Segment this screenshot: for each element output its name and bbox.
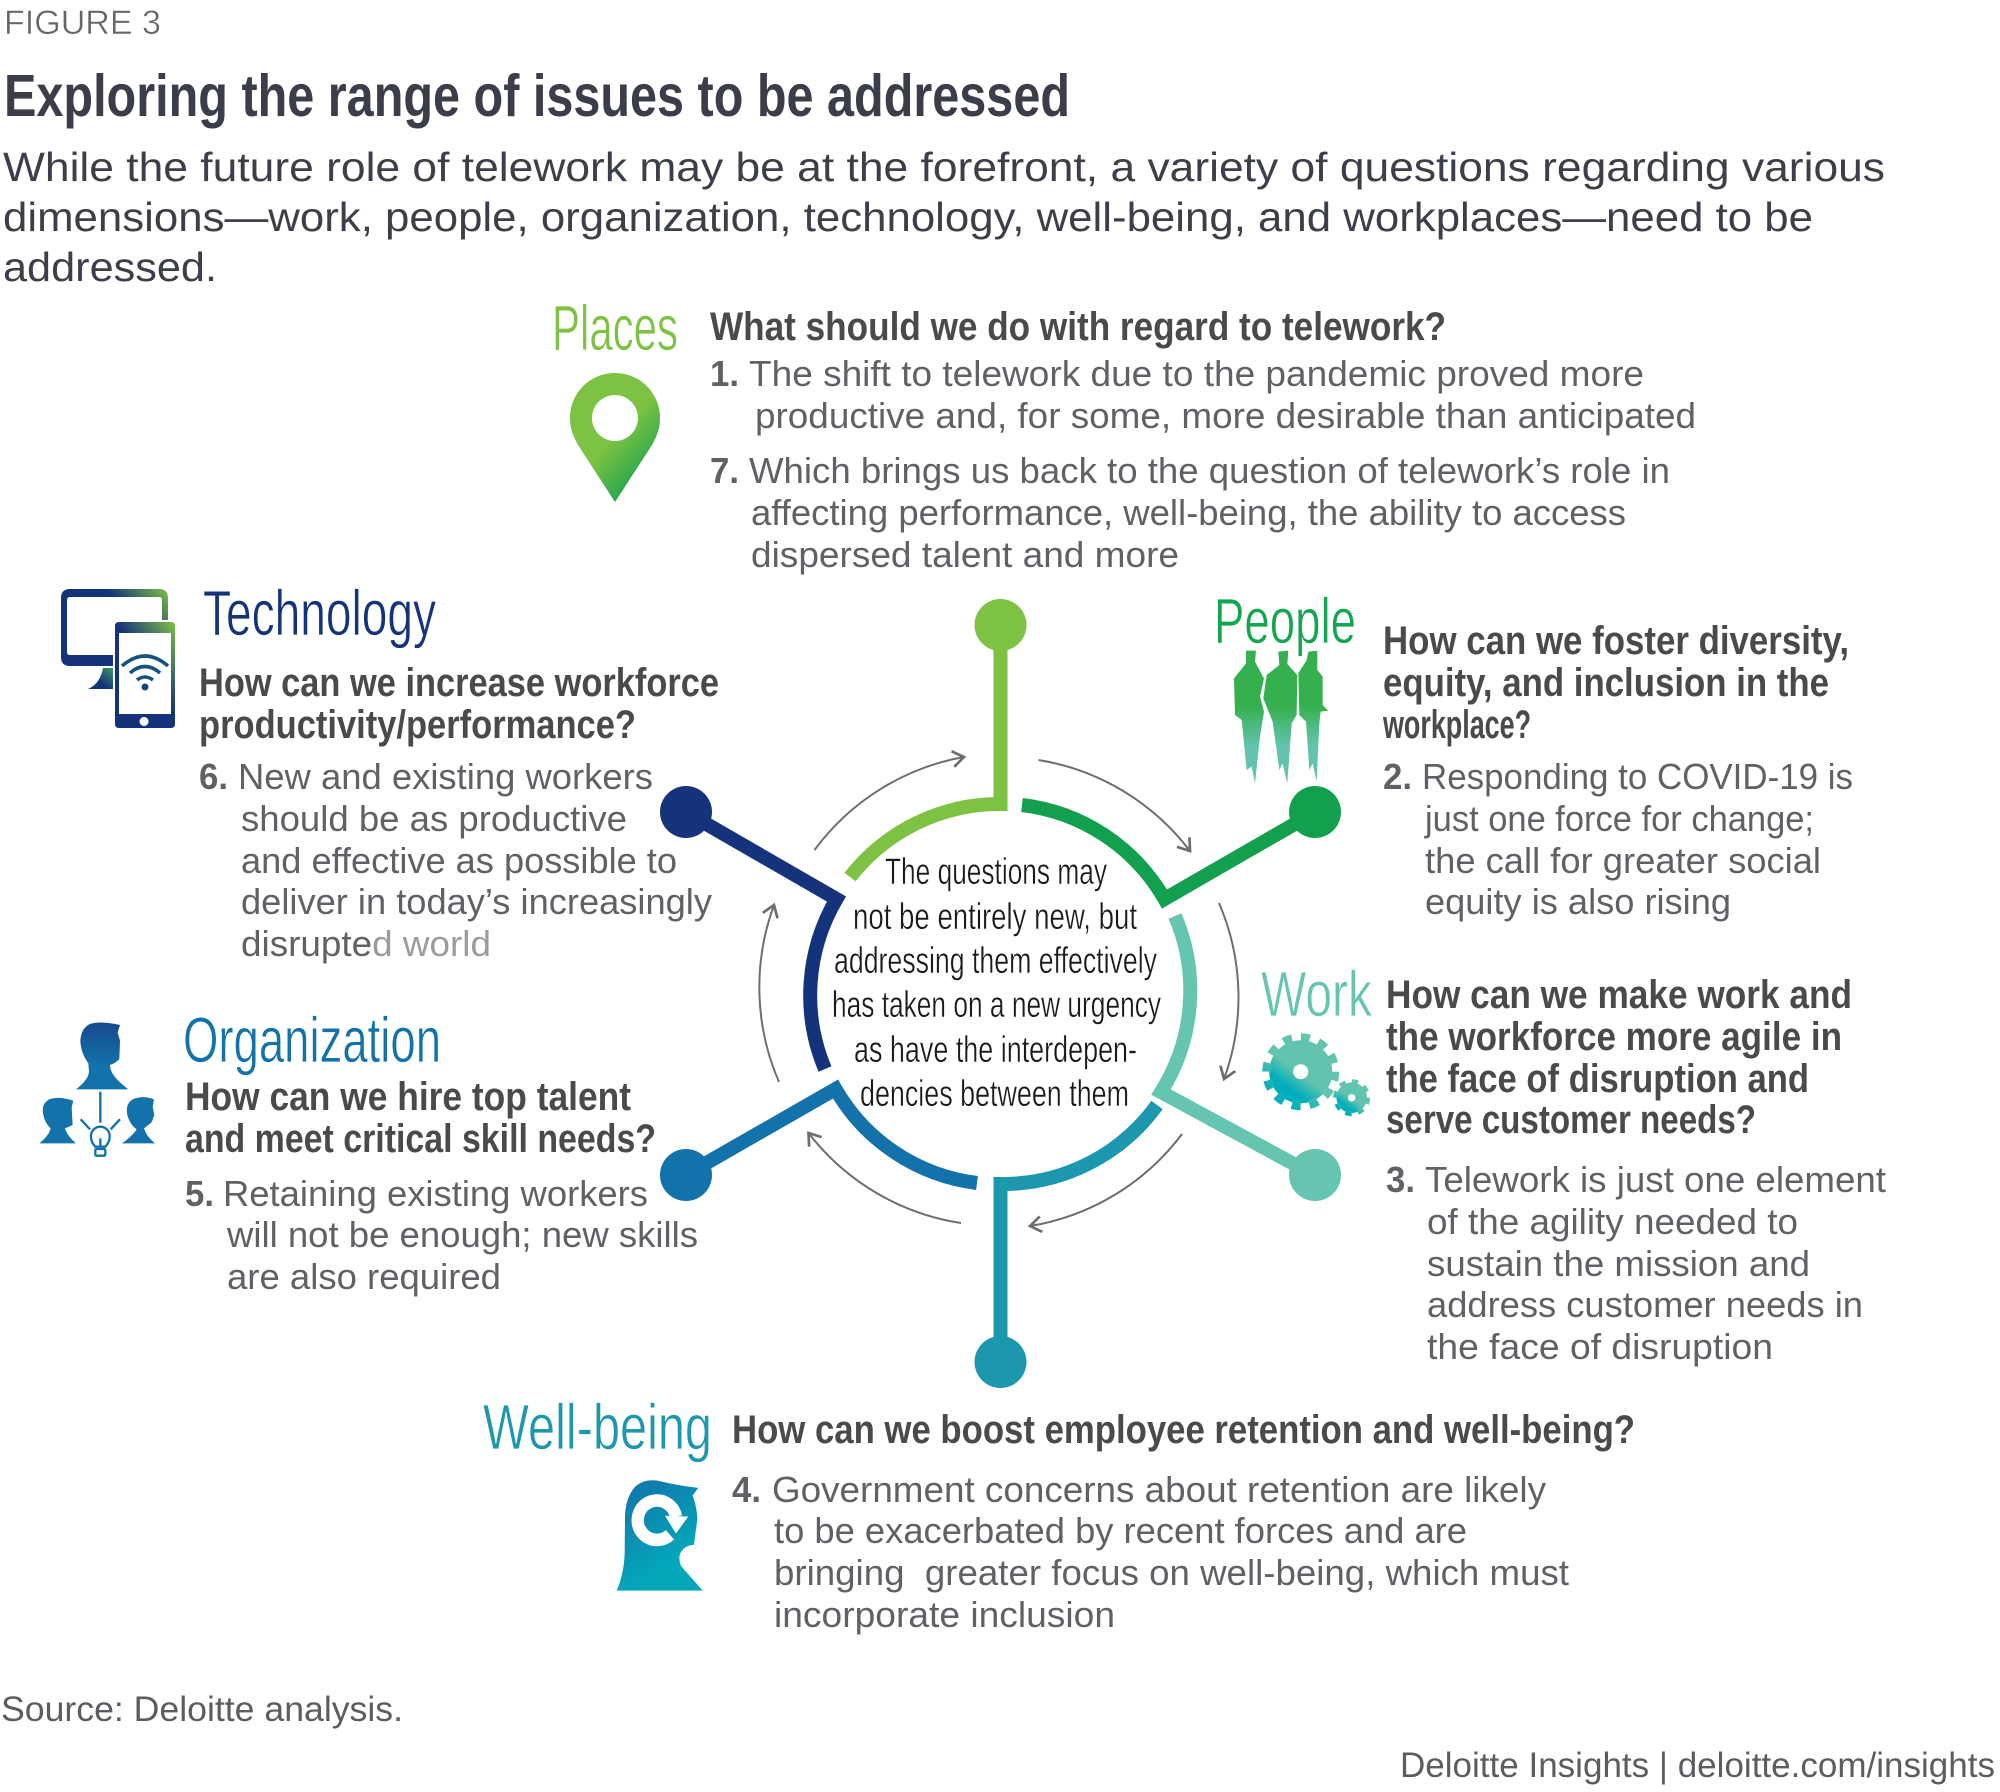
question: places: What should we do with regard to telework? [710,305,1446,349]
item 5: 5. [185,1173,214,1214]
center text: addressing them effectively [834,940,1157,981]
item 2 [1383,756,1853,922]
center text: dencies between them [860,1073,1129,1114]
question: people: workplace? [1382,703,1531,747]
center text [832,851,1161,1114]
central hub diagram [660,599,1341,1388]
item 4: incorporate inclusion [774,1594,1115,1635]
item 5: Retaining existing workers [223,1173,648,1214]
item 2: 2. [1383,756,1412,797]
item 4: bringing greater focus on well-being, which must [774,1552,1569,1593]
subtitle [3,144,1885,290]
icon: three silhouettes [1234,651,1328,783]
figure label: FIGURE 3 [4,4,161,42]
item 2: Responding to COVID-19 is [1422,756,1853,797]
center text: has taken on a new urgency [832,984,1161,1025]
subtitle: While the future role of telework may be at the forefront, a variety of questions regarding various [3,144,1885,190]
center text: not be entirely new, but [853,896,1138,937]
item 3: of the agility needed to [1427,1201,1798,1242]
spoke: well-being [974,1105,1157,1388]
heading: well-being: Well-being [483,1391,712,1463]
question: organization: How can we hire top talent [185,1075,631,1119]
center text: as have the interdepen- [854,1029,1137,1070]
item 7: dispersed talent and more [751,534,1179,575]
item 1: 1. [710,353,739,394]
spoke: people [1022,786,1341,899]
panel: technology [61,577,719,964]
question: work: How can we make work and [1386,973,1852,1017]
question: work: the workforce more agile in [1386,1015,1842,1059]
question: work: serve customer needs? [1386,1098,1756,1142]
question: people: equity, and inclusion in the [1383,661,1829,705]
cycle arrows [759,757,1238,1226]
item 4: Government concerns about retention are likely [772,1469,1546,1510]
heading: technology: Technology [203,577,436,649]
heading: work: Work [1261,958,1373,1030]
subtitle: dimensions—work, people, organization, technology, well-being, and workplaces—need to be [3,194,1813,240]
item 6: 6. [199,756,228,797]
question: well-being: How can we boost employee retention and well-being? [732,1408,1635,1452]
item 1: productive and, for some, more desirable than anticipated [755,395,1696,436]
item 7: Which brings us back to the question of telework’s role in [749,450,1670,491]
item 6: and effective as possible to [241,840,677,881]
item 7: affecting performance, well-being, the ability to access [751,492,1626,533]
item 6: disrupted world [241,923,491,964]
source note: Source: Deloitte analysis. [1,1690,403,1729]
panel: organization [39,1004,698,1297]
item 6: New and existing workers [238,756,653,797]
heading: places: Places [552,292,678,364]
item 4: 4. [732,1469,761,1510]
spoke: technology [660,786,836,1069]
question: people [1382,619,1849,747]
question: people: How can we foster diversity, [1383,619,1849,663]
item 3: 3. [1386,1159,1415,1200]
credit: Deloitte Insights | deloitte.com/insights [1400,1746,1995,1785]
heading: people: People [1214,585,1356,657]
item 2: equity is also rising [1425,881,1731,922]
item 1 [710,353,1696,436]
item 6 [199,756,712,964]
spoke: places [850,599,1026,877]
item 4 [732,1469,1569,1635]
item 2: the call for greater social [1425,840,1821,881]
item 5 [185,1173,698,1297]
item 3: sustain the mission and [1427,1243,1810,1284]
spoke: work [1161,916,1341,1201]
question: technology [199,661,719,747]
title: Exploring the range of issues to be addressed [4,63,1070,129]
question: technology: How can we increase workforce [199,661,719,705]
item 5: are also required [227,1256,501,1297]
center text: The questions may [885,851,1107,892]
icon: people and light bulb [39,1023,155,1156]
panel: places [552,292,1696,575]
question: work: the face of disruption and [1386,1057,1809,1101]
item 5: will not be enough; new skills [226,1214,698,1255]
item 7: 7. [710,450,739,491]
heading: organization: Organization [183,1004,441,1076]
question: organization [185,1075,656,1161]
icon: location pin [570,373,660,502]
item 3: Telework is just one element [1425,1159,1886,1200]
item 3: the face of disruption [1427,1326,1773,1367]
item 7 [710,450,1670,575]
item 4: to be exacerbated by recent forces and are [774,1510,1467,1551]
item 3 [1386,1159,1886,1367]
icon: monitor and tablet [61,589,175,728]
question: organization: and meet critical skill needs? [185,1117,656,1161]
panel: well-being [483,1391,1635,1635]
question: technology: productivity/performance? [199,703,636,747]
spoke: organization [660,1089,977,1201]
item 3: address customer needs in [1427,1284,1863,1325]
panel: work [1261,958,1886,1367]
item 1: The shift to telework due to the pandemic proved more [749,353,1644,394]
item 6: deliver in today’s increasingly [241,881,712,922]
item 2: just one force for change; [1424,798,1814,839]
item 6: should be as productive [241,798,627,839]
icon: head with circular arrow [617,1480,703,1591]
panel: people [1214,585,1853,922]
question: work [1386,973,1852,1142]
icon: gears [1267,1038,1368,1114]
subtitle: addressed. [3,244,217,290]
